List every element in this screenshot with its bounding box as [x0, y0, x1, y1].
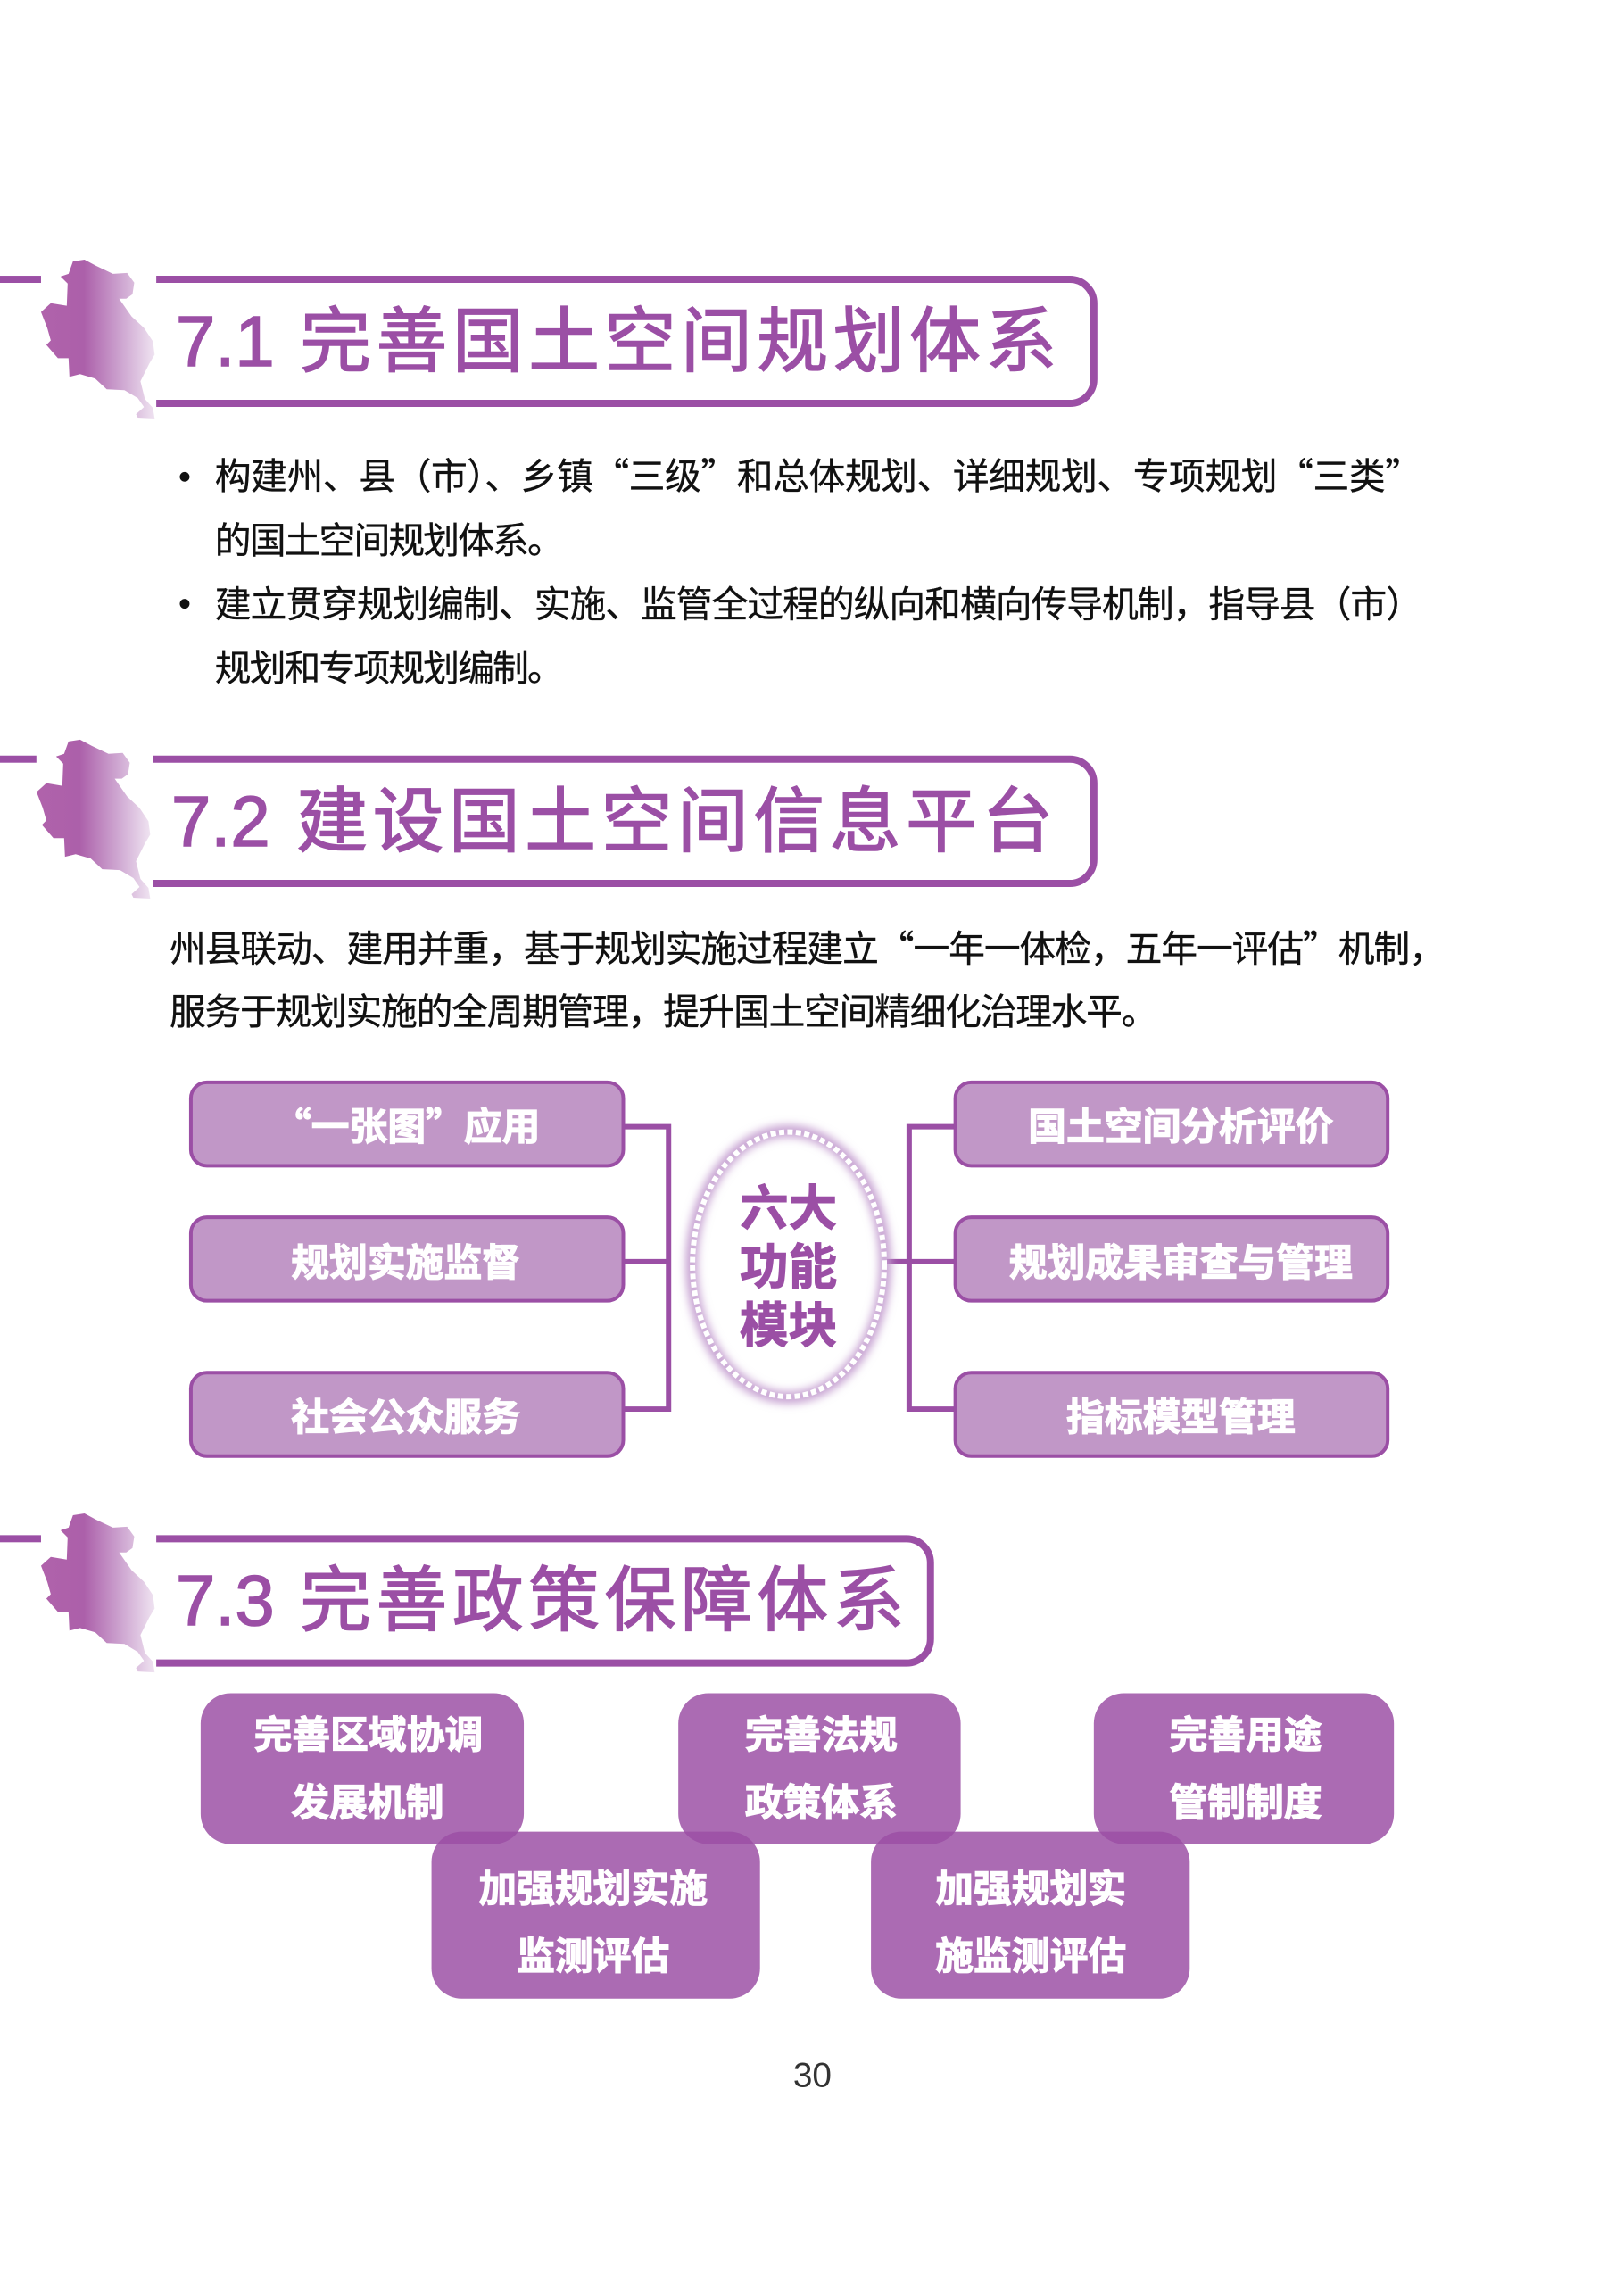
module: 规划成果审查与管理: 规划成果审查与管理 — [1009, 1232, 1353, 1288]
module: 社会公众服务: 社会公众服务 — [291, 1387, 520, 1442]
module: 规划实施监督 — [191, 1217, 623, 1301]
box: 加强规划实施监测评估 (right): 加强规划实 — [935, 1858, 1126, 1913]
box: 加强规划实施监测评估: 监测评估 — [517, 1926, 669, 1981]
connectors right — [887, 1127, 955, 1409]
paragraph 7.2 — [170, 920, 1446, 1035]
header frame 7.2 — [153, 759, 1094, 883]
box: 加强规划实施监测评估 (right) — [871, 1832, 1189, 1999]
box: 加强规划实施监测评估 — [432, 1832, 760, 1999]
box: 完善用途管制制度: 完善用途 — [1169, 1704, 1322, 1760]
module: 国土空间分析评价 — [956, 1082, 1388, 1165]
box: 完善用途管制制度: 管制制度 — [1169, 1772, 1322, 1828]
diagram: six function modules — [191, 1082, 1388, 1456]
left stub line 7.2 — [0, 756, 37, 763]
box: 加强规划实施监测评估 (right): 施监测评估 — [935, 1926, 1126, 1981]
policy boxes — [201, 1693, 1394, 1999]
module: 社会公众服务 — [191, 1372, 623, 1456]
module: 国土空间分析评价: 国土空间分析评价 — [1028, 1097, 1333, 1152]
icon: region map 7.1 — [41, 260, 154, 419]
box: 完善法规政策体系 — [678, 1693, 961, 1844]
module: 规划成果审查与管理 — [956, 1217, 1388, 1301]
box: 完善区域协调发展机制: 完善区域协调 — [254, 1704, 483, 1760]
box: 完善用途管制制度 — [1094, 1693, 1394, 1844]
paragraph 7.2: 服务于规划实施的全周期管理，提升国土空间精细化治理水平。 — [170, 982, 1157, 1035]
module: 规划实施监督: 规划实施监督 — [291, 1232, 520, 1288]
title 7.2: 建设国土空间信息平台 — [296, 764, 1058, 866]
box: 完善区域协调发展机制 — [201, 1693, 524, 1844]
center oval — [692, 1131, 885, 1397]
icon: region map 7.3 — [41, 1513, 154, 1672]
module: 一张图应用: “一张图”应用 — [273, 1097, 540, 1152]
section header 7.3 — [0, 1513, 931, 1672]
icon: region map 7.2 — [37, 740, 150, 899]
bullet 2 text: 建立贯穿规划编制、实施、监管全过程的纵向和横向传导机制，指导县（市） — [215, 576, 1422, 628]
title 7.3: 完善政策保障体系 — [300, 1543, 909, 1645]
section header 7.2 — [0, 740, 1094, 899]
box: 加强规划实施监测评估: 加强规划实施 — [478, 1858, 708, 1913]
title 7.3: 7.3 — [176, 1561, 275, 1640]
title 7.1: 完善国土空间规划体系 — [300, 284, 1062, 386]
bullet 2 — [179, 599, 189, 609]
page number: 30 — [793, 2056, 832, 2094]
bullet list 7.1: 规划和专项规划编制。 — [215, 639, 564, 692]
left stub line 7.1 — [0, 276, 41, 283]
paragraph 7.2: 州县联动、建用并重，基于规划实施过程建立“一年一体检，五年一评估”机制， — [170, 920, 1446, 973]
header frame 7.3 — [156, 1538, 931, 1663]
module: 一张图应用 — [191, 1082, 623, 1165]
module: 指标模型管理: 指标模型管理 — [1066, 1387, 1296, 1442]
section header 7.1 — [0, 260, 1094, 419]
left stub line 7.3 — [0, 1535, 41, 1542]
header frame 7.1 — [156, 279, 1094, 403]
center oval: 功能 — [740, 1228, 837, 1298]
center oval: 模块 — [740, 1286, 837, 1356]
box: 完善区域协调发展机制: 发展机制 — [291, 1772, 443, 1828]
box: 完善法规政策体系: 政策体系 — [745, 1772, 898, 1828]
bullet list 7.1: 的国土空间规划体系。 — [215, 511, 564, 564]
title 7.1: 7.1 — [176, 302, 275, 381]
connectors left — [624, 1127, 668, 1409]
title 7.2: 7.2 — [171, 782, 270, 861]
module: 指标模型管理 — [956, 1372, 1388, 1456]
box: 完善法规政策体系: 完善法规 — [745, 1704, 898, 1760]
bullet list 7.1 — [179, 447, 1422, 692]
bullet 1 — [179, 472, 189, 482]
center oval text: 六大 — [740, 1169, 837, 1239]
bullet 1 text: 构建州、县（市）、乡镇“三级”和总体规划、详细规划、专项规划“三类” — [215, 447, 1421, 500]
